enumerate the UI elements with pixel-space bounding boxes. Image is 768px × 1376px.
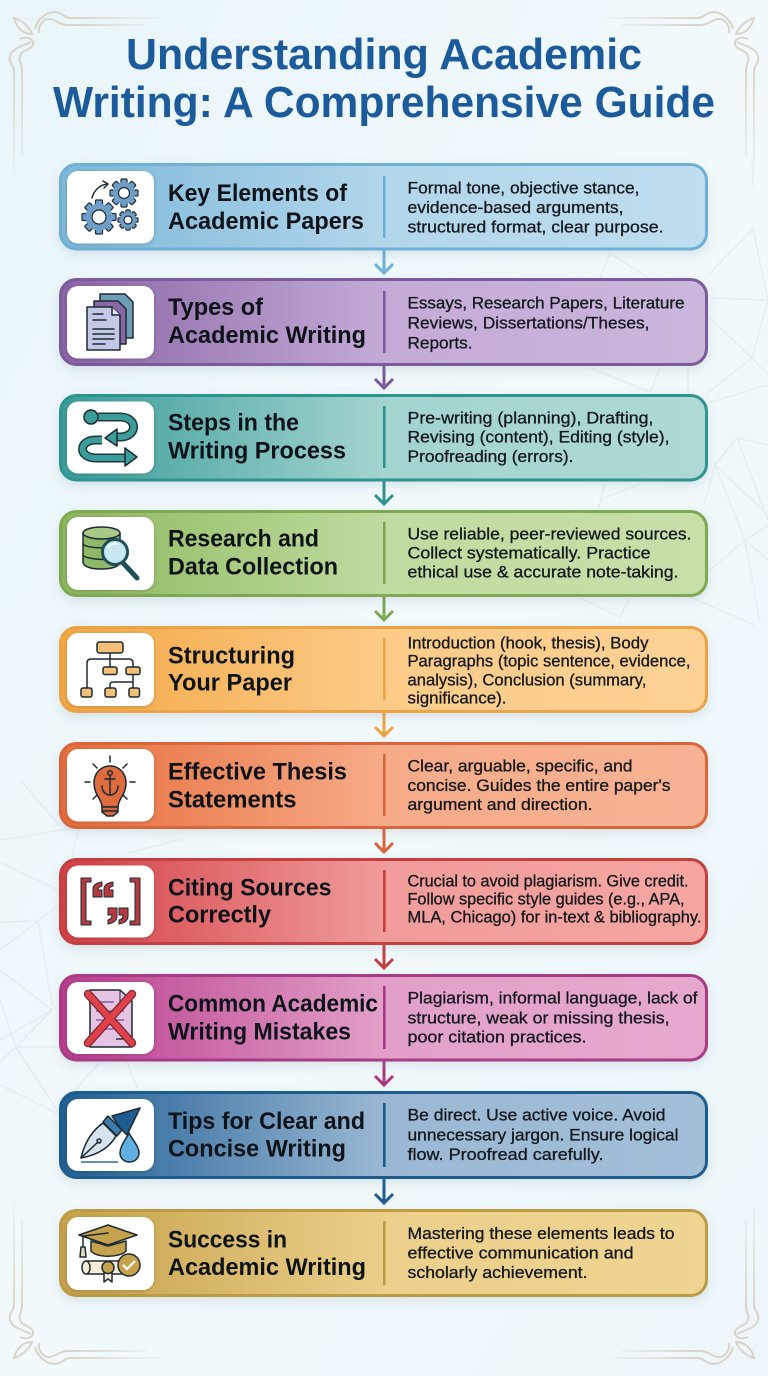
description: analysis), Conclusion (summary, (408, 671, 646, 689)
panel: tips for clear and concise writing (60, 1092, 706, 1178)
icon: fountain pen and ink drop (81, 1108, 140, 1162)
heading: Types of (168, 294, 264, 321)
heading: Tips for Clear and (168, 1108, 365, 1135)
heading: Academic Writing (168, 1254, 366, 1281)
heading: Academic Writing (168, 322, 366, 349)
title: Writing: A Comprehensive Guide (53, 79, 715, 127)
heading: Writing Process (168, 437, 346, 464)
description: concise. Guides the entire paper's (408, 776, 670, 795)
heading: Steps in the (168, 410, 299, 437)
description: structure, weak or missing thesis, (408, 1008, 670, 1027)
heading (168, 991, 378, 1045)
description: Formal tone, objective stance, (408, 178, 640, 198)
arrow: card 6 to 7 (375, 829, 393, 852)
heading: Key Elements of (168, 180, 348, 207)
description: poor citation practices. (408, 1028, 586, 1047)
heading (168, 410, 346, 464)
panel: research and data collection (60, 512, 706, 596)
arrow: card 9 to 10 (375, 1179, 393, 1203)
icon: looping process arrows (82, 410, 137, 466)
heading: Academic Papers (168, 208, 364, 235)
arrow: card 3 to 4 (375, 481, 393, 504)
heading: Statements (168, 786, 296, 813)
description: Reports. (408, 333, 472, 352)
description: ethical use & accurate note-taking. (408, 563, 678, 582)
arrow: card 5 to 6 (375, 713, 393, 736)
panel: key elements of academic papers (60, 164, 706, 249)
arrow: card 4 to 5 (375, 597, 393, 620)
arrow: card 2 to 3 (375, 366, 393, 388)
description: effective communication and (408, 1244, 634, 1263)
arrow: card 1 to 2 (375, 250, 393, 273)
panel: common academic writing mistakes (60, 976, 706, 1060)
description (408, 1224, 674, 1282)
title: Understanding Academic (126, 31, 642, 79)
description: argument and direction. (408, 795, 592, 814)
description: Revising (content), Editing (style), (408, 428, 670, 447)
heading (168, 526, 338, 580)
icon: graduation cap and diploma (79, 1225, 140, 1282)
panel: effective thesis statements (60, 744, 706, 828)
description: evidence-based arguments, (408, 198, 624, 217)
icon: gears (82, 179, 138, 234)
description: Proofreading (errors). (408, 447, 574, 466)
panel: types of academic writing (60, 280, 706, 364)
icon: light bulb with anchor (85, 756, 135, 816)
description: Introduction (hook, thesis), Body (408, 634, 649, 652)
description: Crucial to avoid plagiarism. Give credit. (408, 873, 688, 891)
description (408, 873, 702, 927)
heading (168, 294, 366, 349)
description: Clear, arguable, specific, and (408, 757, 632, 776)
description (408, 634, 690, 707)
description: scholarly achievement. (408, 1263, 588, 1282)
description: Reviews, Dissertations/Theses, (408, 313, 650, 332)
description (408, 988, 698, 1047)
description: Follow specific style guides (e.g., APA, (408, 891, 684, 909)
heading: Success in (168, 1226, 287, 1253)
heading (168, 180, 364, 235)
heading: Writing Mistakes (168, 1018, 351, 1045)
panel: success in academic writing (60, 1210, 706, 1296)
description (408, 408, 670, 466)
title (53, 31, 715, 127)
description (408, 757, 670, 814)
description: Essays, Research Papers, Literature (408, 293, 684, 312)
description: Collect systematically. Practice (408, 543, 650, 562)
heading (168, 758, 347, 813)
heading: Data Collection (168, 553, 338, 580)
arrow: card 8 to 9 (375, 1061, 393, 1085)
description: Mastering these elements leads to (408, 1224, 674, 1243)
icon: hierarchy chart (81, 642, 140, 697)
panel: steps in the writing process (60, 396, 706, 480)
arrow: card 7 to 8 (375, 945, 393, 968)
description: Plagiarism, informal language, lack of (408, 988, 698, 1007)
description (408, 524, 692, 582)
description (408, 178, 664, 237)
heading (168, 875, 332, 929)
heading (168, 1108, 365, 1163)
description (408, 293, 684, 352)
heading: Concise Writing (168, 1136, 346, 1163)
heading: Citing Sources (168, 875, 332, 902)
description: significance). (408, 689, 506, 707)
heading: Effective Thesis (168, 758, 347, 785)
description: Use reliable, peer-reviewed sources. (408, 524, 692, 543)
panel: citing sources correctly (60, 860, 706, 944)
icon: stacked documents (87, 294, 133, 350)
description: MLA, Chicago) for in-text & bibliography. (408, 909, 702, 927)
heading: Research and (168, 526, 319, 553)
heading: Structuring (168, 642, 295, 669)
description: structured format, clear purpose. (408, 218, 664, 237)
description: Paragraphs (topic sentence, evidence, (408, 653, 690, 671)
panel: structuring your paper (60, 628, 706, 712)
description: Be direct. Use active voice. Avoid (408, 1106, 666, 1125)
description: flow. Proofread carefully. (408, 1145, 604, 1164)
heading: Correctly (168, 902, 271, 929)
heading (168, 1226, 366, 1281)
heading: Common Academic (168, 991, 378, 1018)
icon: database with magnifier (83, 527, 137, 578)
heading: Your Paper (168, 670, 292, 697)
icon: bracketed quotation marks (81, 878, 140, 925)
description: Pre-writing (planning), Drafting, (408, 408, 654, 427)
description (408, 1106, 678, 1164)
icon: crossed-out document (88, 990, 132, 1047)
heading (168, 642, 295, 697)
description: unnecessary jargon. Ensure logical (408, 1126, 678, 1145)
